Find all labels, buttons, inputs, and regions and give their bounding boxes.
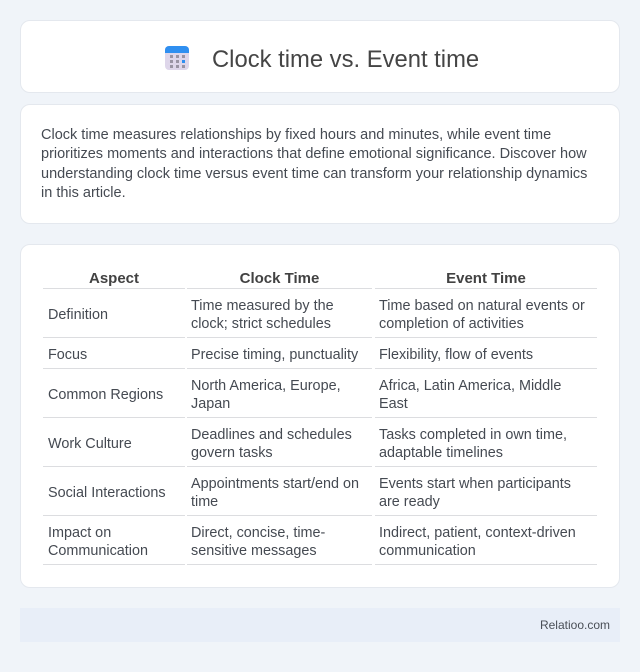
cell: work event time: Tasks completed in own time, bbox=[379, 427, 567, 443]
panel: comparison table bbox=[20, 244, 620, 588]
row: impact on communication bbox=[48, 525, 148, 559]
cell: social event time: Events start when participants bbox=[379, 476, 571, 492]
cell: definition clock time: clock; strict schedules bbox=[191, 316, 331, 332]
cell: regions clock time: Japan bbox=[191, 396, 230, 412]
cell: work clock time: Deadlines and schedules bbox=[191, 427, 352, 443]
cell: focus clock time: Precise timing, punctuality bbox=[191, 347, 358, 363]
title: Clock time vs. Event time bbox=[212, 46, 479, 73]
footer credit: Relatioo.com bbox=[540, 618, 610, 632]
cell: definition clock time: Time measured by the bbox=[191, 298, 334, 314]
row: definition: Definition bbox=[48, 307, 108, 323]
cell: impact event time bbox=[379, 525, 576, 559]
cell: impact clock time: Direct, concise, time- bbox=[191, 525, 325, 541]
cell: definition event time: Time based on natural events or bbox=[379, 298, 585, 314]
table header: aspect: Aspect bbox=[89, 270, 139, 287]
text block: introduction bbox=[41, 127, 587, 201]
row: common regions: Common Regions bbox=[48, 387, 163, 403]
cell: work clock time bbox=[191, 427, 352, 461]
cell: definition event time: completion of activities bbox=[379, 316, 524, 332]
cell: work event time bbox=[379, 427, 567, 461]
cell: regions clock time bbox=[191, 378, 341, 412]
cell: social clock time: Appointments start/end on bbox=[191, 476, 359, 492]
cell: work clock time: govern tasks bbox=[191, 445, 273, 461]
cell: regions event time bbox=[379, 378, 561, 412]
text block: introduction: in this article. bbox=[41, 185, 126, 201]
icon: calendar bbox=[165, 46, 189, 70]
cell: social event time: are ready bbox=[379, 494, 440, 510]
panel: title card bbox=[20, 20, 620, 93]
cell: work event time: adaptable timelines bbox=[379, 445, 503, 461]
row: impact on communication: Communication bbox=[48, 543, 148, 559]
text block: introduction: prioritizes moments and interactions that define emotional significance. Discover how bbox=[41, 146, 587, 162]
cell: social clock time: time bbox=[191, 494, 218, 510]
cell: regions event time: East bbox=[379, 396, 408, 412]
row: impact on communication: Impact on bbox=[48, 525, 111, 541]
cell: regions event time: Africa, Latin America, Middle bbox=[379, 378, 561, 394]
table header: clock time: Clock Time bbox=[240, 270, 319, 287]
row: work culture: Work Culture bbox=[48, 436, 132, 452]
cell: focus event time: Flexibility, flow of events bbox=[379, 347, 533, 363]
table header: event time: Event Time bbox=[446, 270, 526, 287]
text block: introduction: understanding clock time versus event time can transform your relationship dynamics bbox=[41, 166, 587, 182]
cell: definition event time bbox=[379, 298, 585, 332]
footer bar bbox=[20, 608, 620, 642]
cell: impact clock time: sensitive messages bbox=[191, 543, 317, 559]
cell: regions clock time: North America, Europe, bbox=[191, 378, 341, 394]
text block: introduction: Clock time measures relationships by fixed hours and minutes, while event time bbox=[41, 127, 551, 143]
cell: impact clock time bbox=[191, 525, 325, 559]
cell: impact event time: Indirect, patient, context-driven bbox=[379, 525, 576, 541]
cell: impact event time: communication bbox=[379, 543, 476, 559]
cell: social clock time bbox=[191, 476, 359, 510]
cell: definition clock time bbox=[191, 298, 334, 332]
row: focus: Focus bbox=[48, 347, 87, 363]
panel: introduction bbox=[20, 104, 620, 224]
row: social interactions: Social Interactions bbox=[48, 485, 166, 501]
cell: social event time bbox=[379, 476, 571, 510]
